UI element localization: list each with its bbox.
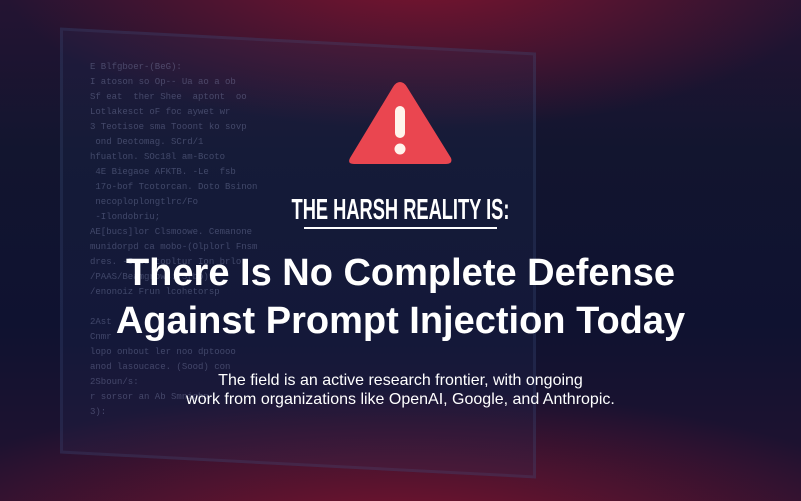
title <box>116 252 685 342</box>
heading: the harsh reality is: THE HARSH REALITY IS: <box>292 194 509 226</box>
background monitor <box>60 28 536 478</box>
title: Against Prompt Injection Today <box>116 300 685 342</box>
subtitle <box>186 372 615 408</box>
subtitle: work from organizations like OpenAI, Google, and Anthropic. <box>186 391 615 408</box>
background code text: E Blfgboer-(BeG): I atoson so Op-- Ua ao a ob Sf eat ther Shee aptont oo Lotlakesct oF foc aywet wr 3 Teotisoe sma Tooont ko sovp ond Deotomag. SCrd/1 hfuatlon. SOc18l am-Bcoto 4E Biegaoe AFKTB. -Le fsb 17o-bof Tcotorcan. Doto Bsinon necoploplongtlrc/Fo -Ilondobriu; AE[bucs]lor Clsmoowe. Cemanone munidorpd ca mobo-(Olplorl Fnsm dres. -Impo topltur Ion brlo /PAAS/Beamgrows. S(bo) /enonoiz Frun lcohetorsp 2Ast Cnmr lopo onbout ler noo dptoooo anod lasoucace. (Sood) con 2Sboun/s: r sorsor an Ab Smnighp 3): <box>90 62 257 417</box>
icon: warning triangle <box>349 82 452 164</box>
subtitle: The field is an active research frontier, with ongoing <box>218 372 583 389</box>
title: There Is No Complete Defense <box>126 252 675 294</box>
underline <box>304 227 497 229</box>
